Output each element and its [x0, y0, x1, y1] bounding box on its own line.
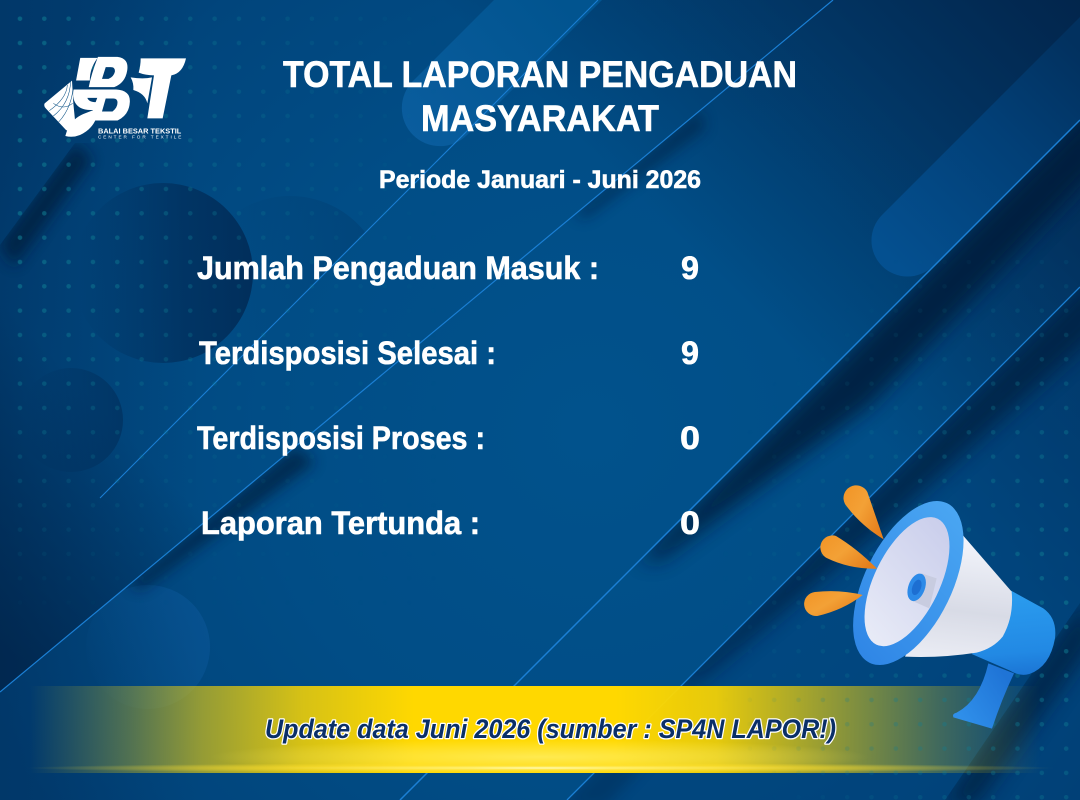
decorative rounded bar top centre — [402, 0, 602, 146]
decorative blue circle bottom left — [116, 585, 210, 686]
logo lower B — [74, 90, 129, 120]
row: laporan tertunda — [201, 505, 700, 541]
title: TOTAL LAPORAN PENGADUAN — [283, 54, 797, 95]
logo T — [139, 58, 186, 118]
row: terdisposisi selesai — [199, 335, 699, 371]
megaphone back cylinder — [972, 587, 1055, 675]
megaphone inner bell — [847, 504, 967, 659]
row: pengaduan masuk: 9 — [681, 250, 699, 286]
row: pengaduan masuk: Jumlah Pengaduan Masuk : — [197, 250, 599, 286]
logo subtitle: CENTER FOR TEXTILE — [98, 134, 181, 139]
logo leaf — [65, 108, 99, 137]
decorative dark circle left — [73, 183, 253, 363]
decorative dark circle large — [325, 204, 365, 264]
logo name: BALAI BESAR TEKSTIL — [98, 126, 182, 135]
logo connecting stroke — [131, 77, 152, 103]
banner text: Update data Juni 2026 (sumber : SP4N LAPOR!) — [265, 714, 836, 744]
period subtitle: Periode Januari - Juni 2026 — [379, 166, 701, 194]
row: terdisposisi proses: 0 — [680, 420, 700, 456]
megaphone handle — [953, 663, 1014, 729]
logo BBT — [44, 57, 186, 139]
decorative rounded bar top right — [871, 17, 1080, 277]
logo emblem threads — [49, 81, 73, 122]
row: terdisposisi proses: Terdisposisi Proses : — [197, 420, 485, 456]
dot pattern right — [748, 262, 1068, 800]
row: terdisposisi proses — [197, 420, 700, 456]
decorative dark circle small — [19, 368, 123, 472]
sound spark bottom — [804, 591, 863, 616]
megaphone driver — [904, 571, 937, 608]
logo textile emblem — [44, 81, 75, 131]
logo upper B — [77, 57, 127, 87]
row: laporan tertunda: Laporan Tertunda : — [201, 505, 480, 541]
megaphone cone — [905, 535, 1012, 657]
sound spark middle — [820, 535, 877, 569]
title — [283, 54, 797, 139]
row: laporan tertunda: 0 — [680, 505, 700, 541]
dot pattern left — [18, 16, 338, 556]
data rows — [197, 250, 700, 541]
row: terdisposisi selesai: Terdisposisi Selesai : — [199, 335, 496, 371]
title: MASYARAKAT — [421, 98, 659, 139]
sound spark top — [843, 485, 884, 539]
icon: megaphone — [804, 484, 1055, 729]
megaphone rim — [830, 484, 986, 682]
row: terdisposisi selesai: 9 — [681, 335, 699, 371]
yellow banner — [25, 686, 1055, 775]
